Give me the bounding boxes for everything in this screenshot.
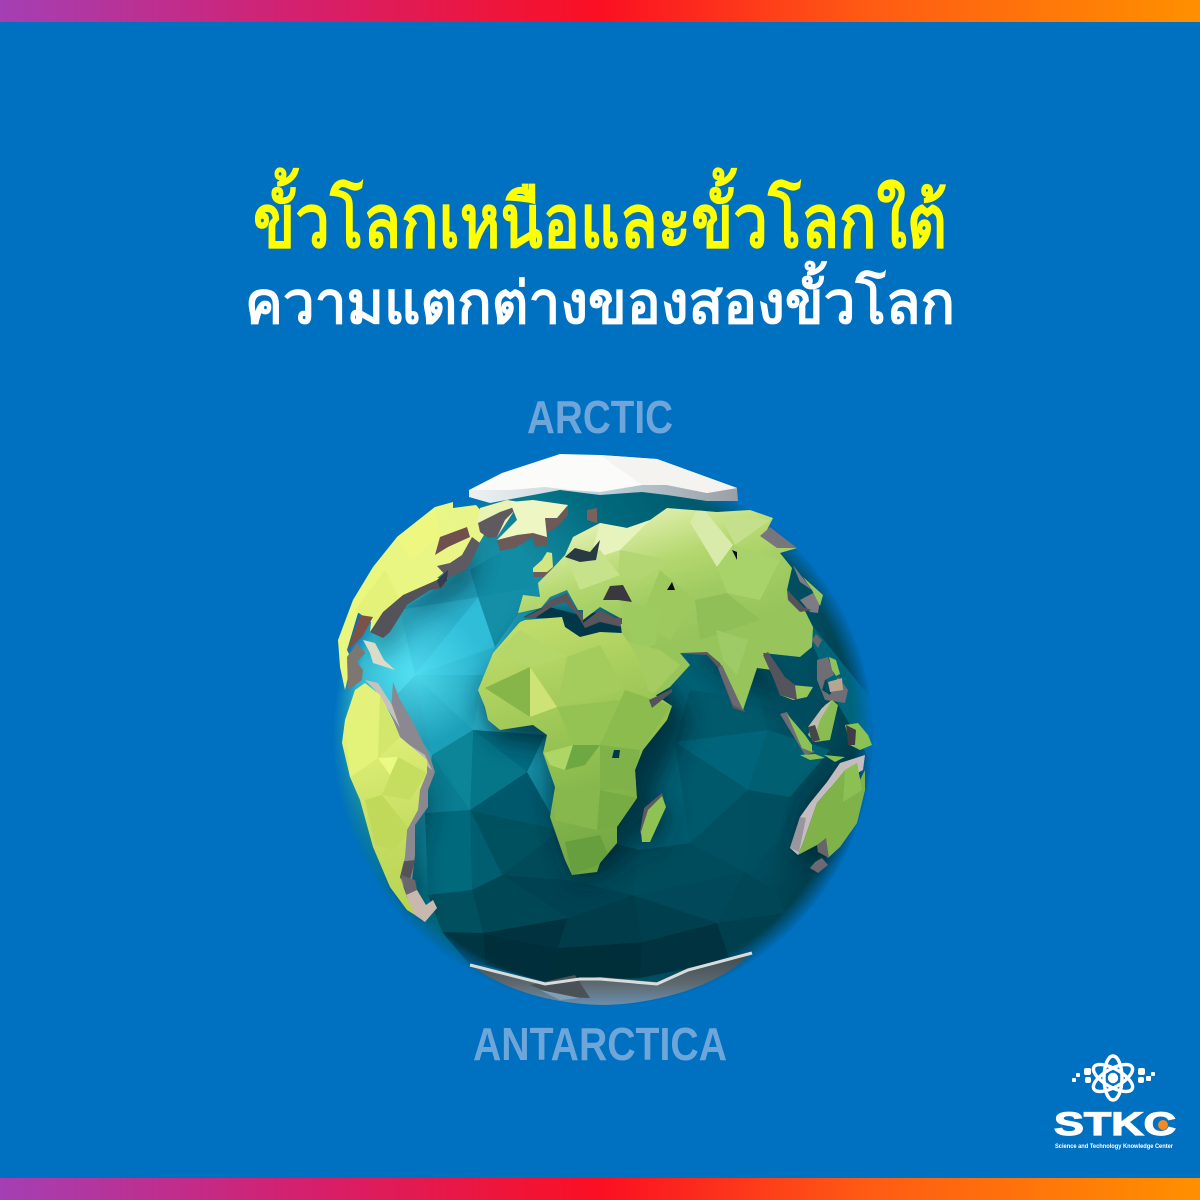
label: antarctica: ANTARCTICA [473,1018,727,1070]
sea: mediterranean [524,606,624,640]
gulf of aden cliff [649,689,672,708]
logo dots [1072,1068,1155,1083]
hudson bay [435,527,470,555]
arctic ice cap [469,454,738,503]
baltic and black seas [565,540,600,562]
east coast cliffs [370,580,448,638]
south america [342,680,437,922]
globe [332,454,874,1007]
logo atom icon [1089,1056,1137,1100]
kamchatka and coast cliffs [760,527,797,548]
southeast asia islands [780,657,872,762]
africa [478,617,672,875]
logo wordmark: STKC [1054,1106,1176,1142]
eurasia [518,505,823,712]
ocean facets [333,466,873,1006]
logo orange dot [1158,1120,1168,1130]
lake spots [667,582,675,590]
australia [790,755,865,873]
label: arctic: ARCTIC [527,391,673,443]
uk [533,552,553,577]
india cliff [718,665,743,710]
southeast asia cliffs [763,652,797,700]
antarctic ice cap [470,953,752,1005]
canadian arctic islands [477,500,520,538]
north america [338,502,490,690]
madagascar [640,793,666,842]
logo: STKC [1054,1056,1176,1150]
greenland [497,500,568,551]
bottom gradient bar [0,1178,1200,1200]
central america [347,643,365,690]
lake spot [612,750,620,758]
land shadows [375,545,860,920]
logo tagline: Science and Technology Knowledge Center [1055,1144,1174,1150]
title: ขั้วโลกเหนือและขั้วโลกใต้ [253,167,947,263]
globe rim glow [332,465,874,1007]
subtitle: ความแตกต่างของสองขั้วโลก [245,261,955,336]
top gradient bar [0,0,1200,22]
iceland [587,508,597,523]
